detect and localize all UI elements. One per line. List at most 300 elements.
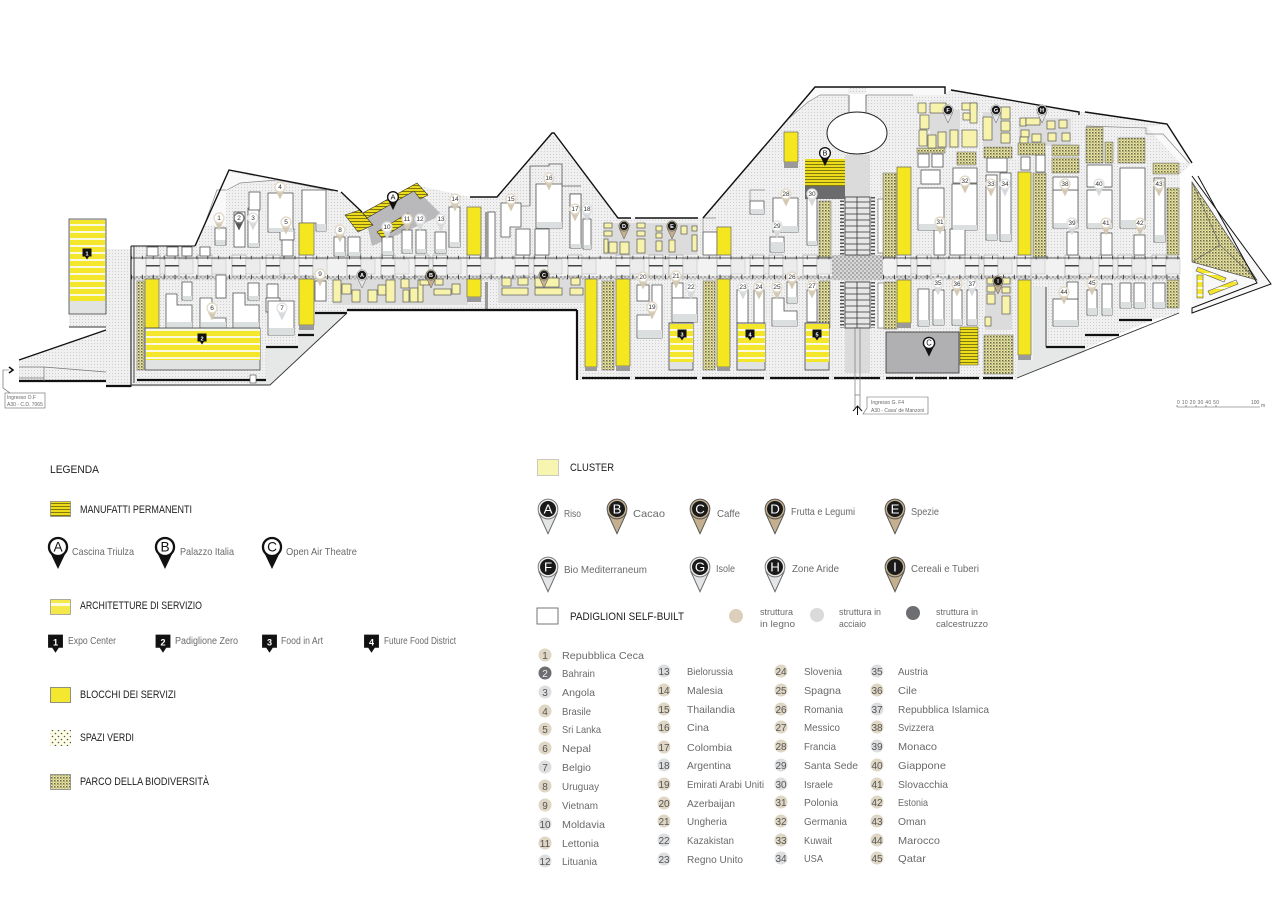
site map xyxy=(3,87,1271,415)
label: blocchi dei servizi: BLOCCHI DEI SERVIZI xyxy=(80,689,176,701)
country list column 1: 12 xyxy=(539,857,551,868)
cluster pin G: G xyxy=(994,108,998,114)
label: palazzo italia: Palazzo Italia xyxy=(180,546,234,558)
pavilion pin 40: 40 xyxy=(1095,181,1103,188)
country list column 2: 19 xyxy=(658,780,670,791)
pavilion pin 36: 36 xyxy=(953,281,961,288)
service pin 4: 4 xyxy=(748,332,752,338)
pavilion pin 21 xyxy=(670,270,682,288)
country list column 3: 30 xyxy=(775,780,787,791)
south entrance stem xyxy=(853,327,862,415)
pavilion pin 18: 18 xyxy=(583,206,591,213)
pavilion pin 34 xyxy=(999,178,1011,196)
west entrance ramp xyxy=(19,367,106,381)
cluster pin H xyxy=(1037,105,1047,123)
country list column 4: Marocco xyxy=(898,835,940,847)
cluster key B cacao: Cacao xyxy=(633,508,665,520)
pavilion pin 8: 8 xyxy=(338,227,342,234)
label: future food district: Future Food District xyxy=(384,636,456,647)
open air theatre xyxy=(886,327,978,373)
cluster pin I: I xyxy=(997,279,999,285)
label: cluster: CLUSTER xyxy=(570,462,614,474)
country list column 4: Slovacchia xyxy=(898,779,948,791)
pavilion pin 39 xyxy=(1066,217,1078,236)
country list column 2: Bielorussia xyxy=(687,666,733,678)
pavilion pin 23 xyxy=(737,281,749,300)
permanent pin C: C xyxy=(926,339,932,348)
swatch: cluster xyxy=(538,460,558,476)
cluster pin B xyxy=(426,270,436,288)
pavilion pin 28 xyxy=(780,188,792,206)
country list column 1: 5 xyxy=(542,725,548,736)
country list column 1: 8 xyxy=(542,782,548,793)
cluster key E spezie: Spezie xyxy=(911,506,939,518)
country list column 1: Sri Lanka xyxy=(562,724,601,736)
pavilion pin 35: 35 xyxy=(934,280,942,287)
pavilion pin 22 xyxy=(685,281,697,300)
pavilion pin 34: 34 xyxy=(1001,181,1009,188)
key: struttura in acciaio: acciaio xyxy=(839,619,866,630)
outer walls xyxy=(19,87,1271,387)
pavilion pin 31: 31 xyxy=(936,219,944,226)
boulevard xyxy=(131,255,1180,280)
building 5 xyxy=(805,323,829,370)
swatch: manufatti permanenti xyxy=(50,502,70,516)
country list column 3: 29 xyxy=(775,761,787,772)
pavilion pin 15: 15 xyxy=(507,196,515,203)
pavilion pin 25: 25 xyxy=(773,284,781,291)
country list column 1: Lettonia xyxy=(562,838,599,850)
country list column 3: Polonia xyxy=(804,797,838,809)
country list column 4: 38 xyxy=(871,723,883,734)
pavilion pin 18 xyxy=(581,203,593,222)
cluster key A riso: Riso xyxy=(564,508,581,520)
key: struttura in calcestruzzo: calcestruzzo xyxy=(936,619,988,630)
pavilion pin 5 xyxy=(280,216,292,234)
country list column 3: Germania xyxy=(804,816,847,828)
pin: expo center: 1 xyxy=(53,638,58,648)
palazzo italia xyxy=(805,159,845,199)
pin: food in art xyxy=(262,635,277,653)
pavilion pin 29 xyxy=(771,220,783,238)
country list column 1: 7 xyxy=(542,763,548,774)
pavilion grey bands xyxy=(167,209,1165,338)
pin: palazzo italia: B xyxy=(160,540,170,555)
pin: future food district: 4 xyxy=(369,638,374,648)
pavilion pin 43: 43 xyxy=(1155,181,1163,188)
pavilion pin 41: 41 xyxy=(1102,220,1110,227)
country list column 4: 45 xyxy=(871,854,883,865)
country list column 2: 13 xyxy=(658,667,670,678)
label: expo center: Expo Center xyxy=(68,636,117,647)
pavilion pin 43 xyxy=(1153,178,1165,196)
label: architetture di servizio: ARCHITETTURE DI SERVIZIO xyxy=(80,600,202,612)
south entrance label: Ingresso G. F4 xyxy=(871,400,904,406)
country list column 2: Kazakistan xyxy=(687,835,734,847)
pavilion pin 12: 12 xyxy=(416,216,424,223)
pavilion pin 19 xyxy=(646,301,658,320)
country list column 2: Emirati Arabi Uniti xyxy=(687,779,764,791)
country list column 4 xyxy=(870,664,989,865)
country list column 1: 10 xyxy=(539,820,551,831)
country list column 3: Santa Sede xyxy=(804,760,858,772)
pavilion pin 29: 29 xyxy=(773,223,781,230)
site ground xyxy=(19,87,1192,387)
cluster key D frutta e legumi: Frutta e Legumi xyxy=(791,506,855,518)
country list column 2: Malesia xyxy=(687,685,723,697)
country list column 3: Israele xyxy=(804,779,833,791)
cluster pin E: E xyxy=(670,224,674,230)
pavilion pin 16 xyxy=(543,172,555,190)
pavilion pin 11 xyxy=(401,213,413,232)
swatch: blocchi dei servizi xyxy=(50,688,70,702)
country list column 3: 34 xyxy=(775,854,787,865)
pavilion pin 38 xyxy=(1059,178,1071,196)
building 3 food in art xyxy=(669,323,693,370)
country list column 4: Repubblica Islamica xyxy=(898,704,989,716)
cluster pin D: D xyxy=(622,224,626,230)
country list column 1: Brasile xyxy=(562,706,591,718)
cascina triulza permanent buildings xyxy=(345,183,428,238)
pavilion pin 21: 21 xyxy=(672,273,680,280)
service pin 5: 5 xyxy=(815,332,819,338)
cluster key I cereali e tuberi xyxy=(885,557,979,592)
cluster key H zone aride: Zone Aride xyxy=(792,563,839,575)
south entrance label xyxy=(863,397,928,414)
cluster pin C xyxy=(539,270,549,288)
cluster key C caffe xyxy=(690,499,740,534)
pavilion pin 9 xyxy=(314,268,326,286)
country list column 2: 16 xyxy=(658,723,670,734)
pavilion pin 38: 38 xyxy=(1061,181,1069,188)
cluster key C caffe: Caffe xyxy=(717,508,740,520)
biodiversity park strips xyxy=(137,127,1179,374)
country list column 3: USA xyxy=(804,853,823,865)
country list column 2: 14 xyxy=(658,686,670,697)
pavilion pin 1 xyxy=(213,212,225,230)
permanent pin A xyxy=(388,192,398,210)
country list column 3: Francia xyxy=(804,741,836,753)
pavilion pin 31 xyxy=(934,216,946,234)
pavilion pin 9: 9 xyxy=(318,271,322,278)
country list column 3: 32 xyxy=(775,817,787,828)
country list column 4: 44 xyxy=(871,836,883,847)
pin: future food district xyxy=(364,635,379,653)
country list column 3: Slovenia xyxy=(804,666,842,678)
cluster key E spezie xyxy=(885,499,939,534)
country list column 4: 36 xyxy=(871,686,883,697)
service pin 5 xyxy=(812,330,822,340)
country list column 1: Angola xyxy=(562,687,595,699)
cluster key G isole xyxy=(690,557,735,592)
key: struttura in legno: struttura xyxy=(760,607,794,618)
cluster pin F xyxy=(943,105,953,123)
permanent pin B xyxy=(820,148,830,166)
country list column 4: 42 xyxy=(871,798,883,809)
label: parco della biodiversita: PARCO DELLA BIODIVERSITÀ xyxy=(80,775,210,788)
pin: open air theatre xyxy=(263,538,281,569)
country list column 2: Argentina xyxy=(687,760,731,772)
pavilion pin 37: 37 xyxy=(968,281,976,288)
pavilion pin 7 xyxy=(276,302,288,320)
pavilion pin 8 xyxy=(334,224,346,242)
pavilion pin 3: 3 xyxy=(251,215,255,222)
country list column 1: 1 xyxy=(542,651,548,662)
permanent pin A: A xyxy=(390,192,396,202)
cluster key D frutta e legumi xyxy=(765,499,855,534)
cluster key H zone aride xyxy=(765,557,839,592)
service pin 3 xyxy=(678,330,686,340)
country list column 2: 20 xyxy=(658,799,670,810)
pavilion pin 30: 30 xyxy=(808,191,816,198)
country list column 4: 35 xyxy=(871,667,883,678)
label: padiglioni self-built: PADIGLIONI SELF-BUILT xyxy=(570,611,684,623)
scale bar: 100 xyxy=(1251,400,1260,406)
cluster pin A xyxy=(357,270,367,288)
pavilions xyxy=(147,154,1165,338)
label: open air theatre: Open Air Theatre xyxy=(286,546,357,558)
pin: food in art: 3 xyxy=(267,638,272,648)
cluster key I cereali e tuberi: Cereali e Tuberi xyxy=(911,563,979,575)
pavilion pin 41 xyxy=(1100,217,1112,236)
country list column 4: 37 xyxy=(871,705,883,716)
pavilion pin 11: 11 xyxy=(404,216,411,223)
pavilion pin 23: 23 xyxy=(739,284,747,291)
pavilion pin 33: 33 xyxy=(987,181,995,188)
country list column 2: Azerbaijan xyxy=(687,798,735,810)
pavilion pin 45 xyxy=(1086,277,1098,296)
pavilion pin 30 xyxy=(806,188,818,206)
pavilion pin 5: 5 xyxy=(284,219,288,226)
label: cascina triulza: Cascina Triulza xyxy=(72,546,134,558)
cluster key A riso: A xyxy=(544,502,553,517)
east park ground xyxy=(1192,176,1271,313)
country list column 4: Svizzera xyxy=(898,722,934,734)
country list column 2: Thailandia xyxy=(687,704,735,716)
key: struttura in legno: in legno xyxy=(760,619,795,630)
country list column 3 xyxy=(774,664,858,865)
central crossing strip xyxy=(845,155,870,373)
cluster key A riso xyxy=(538,499,581,534)
key: struttura in legno xyxy=(729,607,795,630)
west entrance label: Ingresso O.F xyxy=(7,395,36,401)
cluster key C caffe: C xyxy=(695,502,705,517)
pavilion pin 3 xyxy=(247,212,259,230)
country list column 3: 25 xyxy=(775,686,787,697)
label: padiglione zero: Padiglione Zero xyxy=(175,636,238,647)
pin: expo center xyxy=(48,635,63,653)
country list column 1: 9 xyxy=(542,801,548,812)
country list column 4: 41 xyxy=(871,780,883,791)
pavilion pin 26 xyxy=(786,271,798,290)
country list column 3: 33 xyxy=(775,836,787,847)
building 1 expo center xyxy=(69,219,106,314)
country list column 1: Nepal xyxy=(562,743,591,755)
cluster key E spezie: E xyxy=(891,502,900,517)
country list column 4: Giappone xyxy=(898,760,946,772)
pavilion pin 7: 7 xyxy=(280,305,284,312)
country list column 1: Vietnam xyxy=(562,800,598,812)
cluster pin C: C xyxy=(542,273,546,279)
pavilion pin 16: 16 xyxy=(545,175,553,182)
pavilion pin 15 xyxy=(505,193,517,212)
country list column 2: 17 xyxy=(658,743,670,754)
pale wedges xyxy=(204,88,1192,385)
cluster key I cereali e tuberi: I xyxy=(893,560,897,575)
pin: palazzo italia xyxy=(156,538,174,569)
pin: cascina triulza: A xyxy=(53,540,63,555)
legend left column xyxy=(48,464,456,790)
country list column 4: 43 xyxy=(871,817,883,828)
service pin 2 xyxy=(198,334,206,344)
pavilion pin 12 xyxy=(414,213,426,232)
pavilion pin 14 xyxy=(449,193,461,212)
cluster key B cacao: B xyxy=(613,502,622,517)
pavilion pin 1: 1 xyxy=(217,215,221,222)
country list column 2: 22 xyxy=(658,836,670,847)
country list column 1: Uruguay xyxy=(562,781,600,793)
legend title: LEGENDA xyxy=(50,464,100,476)
swatch: padiglioni self-built xyxy=(537,608,558,624)
pavilion pin 10 xyxy=(381,221,393,240)
country list column 1: 6 xyxy=(542,744,548,755)
cluster pin H: H xyxy=(1040,108,1044,114)
cluster pin G xyxy=(991,105,1001,123)
country list column 2: 21 xyxy=(658,817,670,828)
country list column 4: Estonia xyxy=(898,797,928,809)
pavilion pin 14: 14 xyxy=(451,196,459,203)
service block bases xyxy=(299,162,1031,371)
pavilion pin 36 xyxy=(951,278,963,296)
service pin 3: 3 xyxy=(680,332,684,338)
cluster pin D xyxy=(619,221,629,239)
pavilion pin 22: 22 xyxy=(687,284,695,291)
pavilion pin 20 xyxy=(637,271,649,290)
country list column 2: Regno Unito xyxy=(687,854,743,866)
country list column 1: 3 xyxy=(542,688,548,699)
cluster pin F: F xyxy=(946,108,950,114)
key: struttura in acciaio: struttura in xyxy=(839,607,881,618)
country list column 4: 40 xyxy=(871,761,883,772)
service pin 1 xyxy=(82,248,92,260)
crossing stairs xyxy=(842,197,884,328)
pin: padiglione zero xyxy=(156,635,170,653)
permanent pin B: B xyxy=(822,148,828,158)
cluster key H zone aride: H xyxy=(770,560,780,575)
key: struttura in calcestruzzo xyxy=(906,606,988,630)
country list column 4: Qatar xyxy=(898,853,927,865)
country list column 1: Bahrain xyxy=(562,668,595,680)
cluster pin B: B xyxy=(429,273,433,279)
pin: open air theatre: C xyxy=(267,540,277,555)
key: struttura in acciaio xyxy=(810,607,881,630)
pavilion pin 2: 2 xyxy=(237,215,241,222)
pavilion pin 6: 6 xyxy=(210,305,214,312)
south entrance label: A30 - Cava' de Manzoni xyxy=(871,408,924,414)
pavilion pin 24 xyxy=(753,281,765,300)
cluster key D frutta e legumi: D xyxy=(770,502,780,517)
service pin 2: 2 xyxy=(200,336,204,342)
country list column 3: Romania xyxy=(804,704,843,716)
building 4 future food district xyxy=(737,323,765,370)
swatch: parco della biodiversita xyxy=(50,774,70,790)
country list column 3: 24 xyxy=(775,667,787,678)
cluster grey courts xyxy=(333,110,1071,330)
pavilion pin 20: 20 xyxy=(639,274,647,281)
country list column 1: 4 xyxy=(542,707,548,718)
country list column 3: 27 xyxy=(775,723,787,734)
pavilion pin 45: 45 xyxy=(1088,280,1096,287)
label: food in art: Food in Art xyxy=(281,636,323,647)
pavilion pin 6 xyxy=(206,302,218,320)
label: spazi verdi: SPAZI VERDI xyxy=(80,732,134,744)
cluster pin I xyxy=(993,276,1003,294)
pavilion pin 10: 10 xyxy=(383,224,391,231)
pin: cascina triulza xyxy=(49,538,67,569)
pavilion pin 32 xyxy=(959,175,971,194)
pavilion pin 24: 24 xyxy=(755,284,763,291)
scale bar: m xyxy=(1261,403,1265,409)
pin: padiglione zero: 2 xyxy=(160,638,166,648)
country list column 2 xyxy=(658,664,764,866)
cluster key F bio mediterraneum: Bio Mediterraneum xyxy=(564,564,647,576)
permanent pin C xyxy=(923,337,935,357)
pavilion pin 13: 13 xyxy=(437,216,445,223)
west entrance label: A30 - C.D. 7065 xyxy=(7,402,43,408)
country list column 1: Repubblica Ceca xyxy=(562,650,644,662)
country list column 1: 11 xyxy=(540,839,551,850)
cascina triulza grey court xyxy=(365,190,442,246)
pavilion pin 17: 17 xyxy=(571,206,579,213)
country list column 2: Ungheria xyxy=(687,816,727,828)
west entrance label xyxy=(3,370,45,408)
pavilion pin 32: 32 xyxy=(961,178,969,185)
pavilion pin 33 xyxy=(985,178,997,196)
pavilion pin 17 xyxy=(569,203,581,222)
pavilion pin 37 xyxy=(966,278,978,296)
country list column 1: 2 xyxy=(542,669,548,680)
cluster key F bio mediterraneum: F xyxy=(544,560,552,575)
cluster pin A: A xyxy=(360,273,364,279)
country list column 1: Lituania xyxy=(562,856,597,868)
service pin 1: 1 xyxy=(85,252,89,258)
country list column 3: 31 xyxy=(775,798,787,809)
cluster buildings xyxy=(333,103,1070,326)
country list column 4: Oman xyxy=(898,816,926,828)
country list column 4: 39 xyxy=(871,742,883,753)
cluster pin E xyxy=(667,221,677,239)
pavilion pin 26: 26 xyxy=(788,274,796,281)
country list column 3: 26 xyxy=(775,705,787,716)
country list column 4: Cile xyxy=(898,685,917,697)
inner stepped walls xyxy=(204,95,1189,232)
service blocks xyxy=(145,132,1031,367)
key: struttura in calcestruzzo: struttura in xyxy=(936,607,978,618)
swatch: spazi verdi xyxy=(50,730,71,746)
pavilion pin 40 xyxy=(1093,178,1105,196)
country list column 2: Colombia xyxy=(687,742,732,754)
country list column 1: Moldavia xyxy=(562,819,605,831)
country list column 3: 28 xyxy=(775,742,787,753)
pavilion pin 27: 27 xyxy=(808,283,816,290)
country list column 4: Austria xyxy=(898,666,928,678)
scale bar xyxy=(1177,400,1265,409)
east park triangle xyxy=(1192,182,1257,298)
pavilion pin 44: 44 xyxy=(1060,289,1068,296)
pavilion pin 42: 42 xyxy=(1136,220,1144,227)
country list column 2: Cina xyxy=(687,722,709,734)
pavilion pin 35 xyxy=(932,277,944,296)
